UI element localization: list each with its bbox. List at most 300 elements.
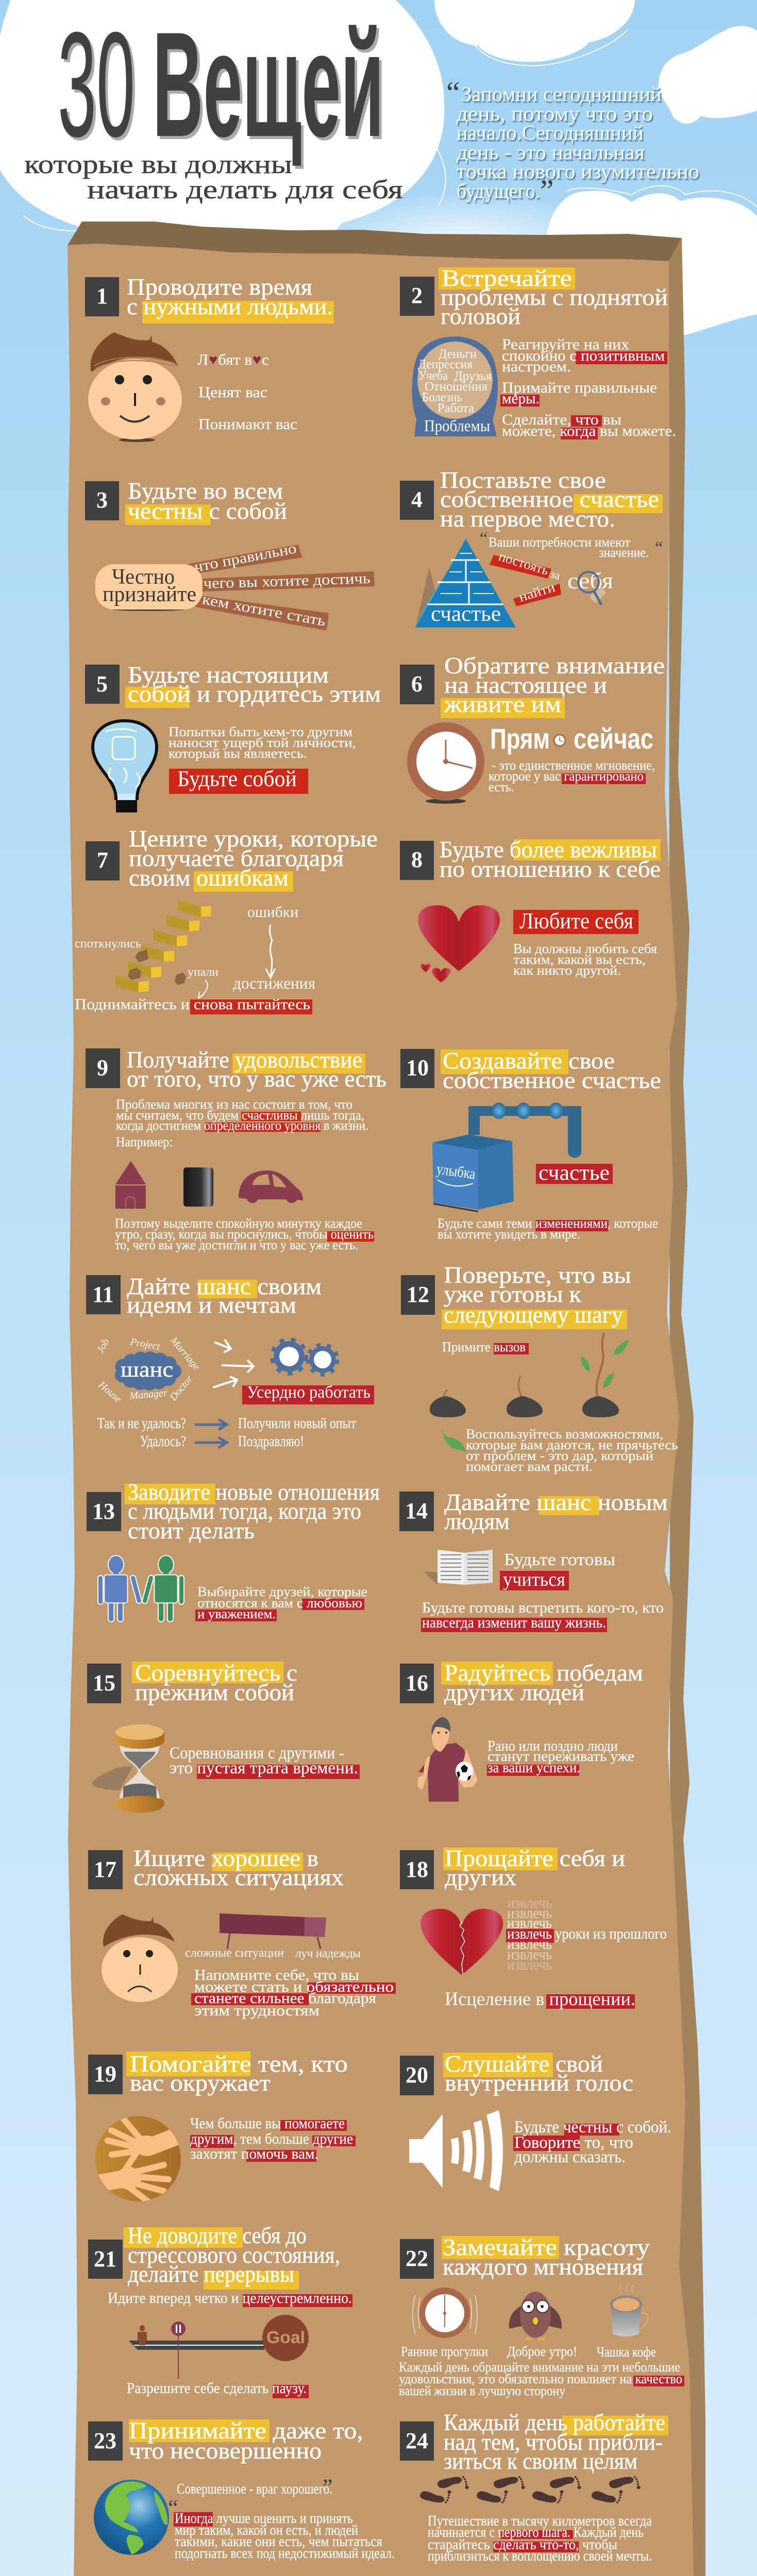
heading 4 (440, 467, 663, 532)
heading 23 (129, 2418, 363, 2464)
illustration: honest admission rays: что правильно (193, 540, 298, 575)
heading 1: Проводите время (127, 274, 312, 300)
illustration: happiness pyramid (415, 539, 516, 628)
panel: item 11 (86, 1274, 374, 1450)
number badge 10 (400, 1049, 434, 1088)
heading 21: делайте перерывы (128, 2261, 294, 2287)
text block: вы хотите увидеть в мире. (438, 1227, 580, 1242)
heading 10: собственное счастье (443, 1067, 661, 1093)
number badge 14: 14 (405, 1498, 428, 1523)
labels: Доброе утро! (507, 2344, 577, 2359)
heading 13: стоит делать (128, 1518, 255, 1544)
number badge 3: 3 (96, 487, 108, 513)
tag: work hard: Усердно работать (247, 1383, 371, 1402)
illustration: honest admission rays: кем хотите стать (201, 591, 327, 630)
icons: house, phone, car (115, 1161, 303, 1209)
number badge 11 (86, 1275, 121, 1314)
panel: item 15 (87, 1660, 360, 1813)
heading 21 (124, 2223, 340, 2290)
number badge 1 (85, 277, 119, 316)
text block: за ваши успехи. (487, 1760, 580, 1776)
text block: удовольствия, это обязательно повлияет на качество (399, 2371, 682, 2386)
illustration: chance cloud: Marriage (168, 1334, 202, 1372)
heading 18: Прощайте себя и (445, 1845, 625, 1871)
text block (513, 941, 657, 978)
text block: захотят помочь вам. (190, 2145, 318, 2162)
heading 7: получаете благодаря (129, 845, 344, 871)
now text: которое у вас гарантировано (489, 769, 644, 784)
text block: как никто другой. (513, 963, 621, 978)
heading 15: Соревнуйтесь с (135, 1660, 297, 1686)
text: accept the challenge: Примите вызов (442, 1340, 526, 1354)
heading 14: Давайте шанс новым (444, 1489, 668, 1515)
number badge 11: 11 (92, 1282, 114, 1307)
text block: относятся к вам с любовью (197, 1596, 362, 1611)
illustration: growing seeds (430, 1333, 629, 1417)
text: learn from the past: извлечь (507, 1905, 552, 1922)
heading 1 (127, 274, 334, 324)
icon: broken heart (420, 1909, 503, 1975)
illustration: crystal ball of problems: Друзья (454, 369, 492, 383)
text block: которые вам даются, не прячьтесь (466, 1437, 678, 1452)
list: qualities: Л♥бят в♥с (197, 351, 269, 368)
heading 18 (443, 1845, 625, 1890)
text block: таким, какой вы есть, (513, 952, 646, 967)
text block (116, 1097, 368, 1149)
heading 3: честны с собой (128, 498, 287, 524)
panel: item 9 (86, 1047, 386, 1252)
text block (421, 1599, 664, 1632)
illustration: crystal ball of problems: Проблемы (424, 416, 490, 435)
text block: Например: (116, 1134, 173, 1149)
heading 10: Создавайте свое (443, 1048, 615, 1074)
icon: light bulb (93, 721, 157, 812)
number badge 15: 15 (93, 1670, 115, 1696)
text block: Выбирайте друзей, которые (197, 1584, 367, 1599)
list: qualities (197, 351, 297, 433)
illustration: crystal ball of problems: Учеба (418, 369, 448, 383)
panel: item 4 (400, 467, 663, 628)
heading 17: Ищите хорошее в (133, 1845, 318, 1871)
text block: Будьте сами теми изменениями, которые (438, 1216, 658, 1231)
number badge 7 (86, 841, 120, 880)
number badge 18 (400, 1850, 434, 1889)
text block: Путешествие в тысячу километров всегда (428, 2513, 652, 2529)
illustration: road to goal (129, 2315, 309, 2379)
heading 13: Заводите новые отношения (128, 1479, 380, 1505)
text block: это пустая трата времени. (170, 1759, 358, 1777)
text: be ready to learn: учиться (503, 1569, 565, 1590)
text block: Напомните себе, что вы (194, 1967, 359, 1984)
text: learn from the past: извлечь (507, 1914, 552, 1931)
illustration: chance cloud: Doctor (167, 1374, 195, 1403)
text block: Сделайте, что вы (502, 411, 621, 428)
illustration: smiling face (88, 332, 182, 442)
heading 5: Будьте настоящим (128, 662, 329, 688)
text: learn from the past (506, 1894, 667, 1973)
heading 3: Будьте во всем (128, 478, 283, 504)
heading 9 (127, 1047, 386, 1092)
text block (428, 2513, 652, 2564)
heading 4: на первое место. (440, 506, 615, 532)
number badge 5: 5 (96, 671, 108, 697)
text block: другим, тем больше другие (190, 2130, 353, 2147)
text block (170, 1744, 360, 1779)
heading 5: собой и гордитесь этим (128, 681, 381, 707)
heading 5 (125, 662, 381, 708)
panel: item 5 (85, 662, 381, 812)
illustration: stairs of mistakes: ошибки (247, 904, 298, 921)
heading 3 (125, 478, 287, 525)
heading 24: над тем, чтобы прибли- (444, 2429, 663, 2455)
icon: loudspeaker (409, 2110, 503, 2191)
heading 14: людям (444, 1509, 510, 1534)
illustration: chance cloud (94, 1334, 254, 1405)
panel: item 2 (400, 265, 676, 439)
icon: owl (509, 2292, 562, 2340)
panel: item 17 (88, 1845, 396, 2019)
tag: be yourself: Будьте собой (177, 766, 297, 791)
panel: item 24 (400, 2410, 668, 2564)
text block: Говорите то, что (514, 2133, 633, 2152)
heading 23: что несовершенно (129, 2438, 322, 2464)
text block: Попытки быть кем-то другим (169, 724, 352, 739)
heading 9: от того, что у вас уже есть (127, 1066, 386, 1092)
text block: такими, какие они есть, чем пытаться (175, 2534, 382, 2550)
tags: stand up for / find yourself: постоять (497, 549, 550, 578)
heading 11: Дайте шанс своим (127, 1274, 322, 1299)
quote: день, потому что это (457, 102, 653, 125)
text block (442, 1427, 678, 1474)
number badge 18: 18 (406, 1857, 428, 1882)
number badge 14 (399, 1492, 434, 1531)
heading 9: Получайте удовольствие (127, 1047, 362, 1073)
number badge 19: 19 (94, 2061, 116, 2087)
number badge 10: 10 (406, 1055, 429, 1080)
tag: love yourself: Любите себя (519, 908, 633, 934)
panel: item 19 (88, 2051, 356, 2202)
text block: Соревнования с другими - (170, 1744, 344, 1762)
illustration: cloud with silver lining bench (185, 1913, 361, 1960)
text block: мы считаем, что будем счастливы лишь тогда, (116, 1108, 364, 1123)
number badge 21 (88, 2240, 123, 2279)
heading 4: Поставьте свое (440, 467, 606, 493)
number badge 9: 9 (97, 1055, 108, 1080)
illustration: crystal ball of problems: Болезнь (422, 391, 462, 404)
heading 21: Не доводите себя до (128, 2223, 307, 2248)
now text: есть. (489, 779, 514, 794)
text block: вашей жизни в лучшую сторону (399, 2383, 565, 2398)
text block: Чем больше вы помогаете (190, 2115, 345, 2132)
tags: stand up for / find yourself: за (549, 567, 562, 582)
heading 23: Принимайте даже то, (129, 2418, 363, 2444)
subtitle: начать делать для себя (87, 175, 403, 205)
number badge 3 (85, 481, 119, 520)
quote (168, 2475, 333, 2520)
number badge 17: 17 (94, 1857, 116, 1882)
illustration: crystal ball of problems: Работа (438, 401, 474, 415)
text block: Поэтому выделите спокойную минутку каждое (115, 1216, 362, 1231)
panel: item 14 (399, 1489, 668, 1632)
text block: можете, когда вы можете. (502, 422, 676, 439)
heading 12: Поверьте, что вы (444, 1262, 631, 1288)
number badge 22 (400, 2239, 434, 2279)
number badge 23: 23 (94, 2428, 116, 2453)
number badge 17 (88, 1850, 123, 1889)
heading 2: головой (441, 303, 520, 329)
heading 13: с людьми тогда, когда это (128, 1498, 361, 1524)
text block (500, 336, 676, 439)
text block: который вы являетесь. (169, 746, 307, 761)
heading 19: Помогайте тем, кто (130, 2051, 348, 2077)
heading 1: с нужными людьми. (127, 294, 333, 319)
text block: утро, сразу, когда вы проснулись, чтобы оценить (115, 1227, 374, 1242)
text block: навсегда изменит вашу жизнь. (422, 1614, 606, 1631)
illustration: sad face (102, 1914, 178, 2002)
quote: your needs matter: “ (480, 529, 487, 548)
text block: настроем. (502, 358, 571, 375)
illustration: cloud with silver lining bench: сложные ситуации (185, 1946, 284, 1960)
list: qualities: Понимают вас (198, 416, 297, 433)
panel: item 16 (400, 1660, 643, 1802)
number badge 8 (400, 841, 434, 880)
illustration: crystal ball of problems (412, 336, 498, 436)
icon: morning clock (412, 2287, 477, 2338)
text block: приблизиться к воплощению своей мечты. (428, 2548, 652, 2564)
illustration: smile machine (432, 1103, 581, 1212)
illustration: smile machine: улыбка (435, 1160, 477, 1183)
text block: Примайте правильные (502, 379, 657, 396)
number badge 8: 8 (411, 847, 423, 872)
number badge 1: 1 (96, 283, 108, 309)
labels (401, 2344, 656, 2360)
illustration: chance cloud: House (96, 1379, 124, 1405)
illustration: stairs of mistakes (75, 900, 315, 1014)
main wooden signboard (68, 222, 705, 2576)
number badge 6 (400, 665, 434, 704)
heading 22: каждого мгновения (443, 2254, 643, 2280)
text block: можете стать и обязательно (194, 1978, 394, 1995)
number badge 4: 4 (411, 487, 423, 512)
number badge 5 (85, 665, 120, 704)
panel: item 8 (400, 837, 661, 982)
icon: open book (424, 1550, 493, 1585)
heading 20 (443, 2051, 633, 2096)
text: Вещей (153, 1, 384, 168)
heading 24: Каждый день работайте (444, 2410, 665, 2435)
text block (190, 2115, 356, 2162)
illustration: crystal ball of problems: Деньги (439, 347, 477, 361)
text block (115, 1216, 374, 1252)
text block: Будьте честны с собой. (514, 2118, 671, 2137)
heading 22: Замечайте красоту (443, 2234, 650, 2260)
text block: старайтесь сделать что-то, чтобы (428, 2537, 617, 2553)
subtitle: которые вы должны (24, 150, 292, 179)
labels: Чашка кофе (597, 2344, 656, 2360)
panel: item 12 (401, 1262, 678, 1474)
heading 6: живите им (444, 691, 561, 717)
heading 11: идеям и мечтам (127, 1292, 296, 1318)
number badge 12 (401, 1275, 435, 1315)
heading 22 (442, 2234, 650, 2280)
text block: станут переживать уже (487, 1749, 634, 1765)
number badge 2: 2 (411, 283, 423, 308)
text block: мир таким, какой он есть, и людей (175, 2522, 358, 2538)
heading 14 (444, 1489, 668, 1534)
text block (399, 2360, 684, 2398)
text block: от проблем - это дар, который (466, 1448, 653, 1463)
quote: будущего. (457, 179, 540, 202)
number badge 24: 24 (406, 2428, 428, 2453)
heading 18: других (445, 1865, 516, 1890)
icon: hearts (418, 905, 500, 982)
panel: item 7 (75, 826, 378, 1014)
heading 20: внутренний голос (445, 2070, 633, 2096)
number badge 4 (400, 481, 434, 520)
text block: Иногда лучше оценить и принять (175, 2511, 353, 2527)
heading 24: зиться к своим целям (444, 2448, 637, 2474)
list: qualities: Ценят вас (198, 384, 267, 401)
number badge 22: 22 (406, 2246, 428, 2271)
heading 4: собственное счастье (440, 486, 659, 512)
heading 7 (129, 826, 378, 892)
illustration: man with football (417, 1717, 478, 1802)
heading 6 (441, 653, 665, 718)
panel: item 22 (399, 2234, 684, 2398)
number badge 12: 12 (407, 1282, 429, 1307)
text block: Вы должны любить себя (513, 941, 657, 956)
number badge 7: 7 (97, 848, 108, 873)
labels: Ранние прогулки (401, 2344, 488, 2359)
outcomes: Так и не удалось? (97, 1415, 186, 1432)
text block (195, 1584, 367, 1621)
quote: your needs matter: Ваши потребности имеют (489, 535, 630, 550)
text block: этим трудностям (194, 2002, 319, 2019)
heading 12: следующему шагу (444, 1302, 623, 1328)
number badge 20 (400, 2056, 434, 2095)
panel: item 18 (400, 1845, 667, 2010)
illustration: friends holding hands (98, 1555, 184, 1622)
illustration: crystal ball of problems: Отношения (425, 380, 487, 394)
now text: Прям (490, 722, 550, 755)
text block (487, 1738, 634, 1776)
heading 24 (444, 2410, 668, 2474)
number badge 24 (400, 2421, 434, 2461)
heading 2: Встречайте (442, 265, 572, 291)
text block: меры. (502, 390, 540, 407)
text: allow a pause: Разрешите себе сделать паузу. (127, 2380, 307, 2397)
heading 16: других людей (444, 1680, 584, 1705)
quote: Запомни сегодняшний (461, 82, 662, 106)
illustration: chance cloud: шанс (121, 1358, 173, 1382)
illustration: chance cloud: Job (94, 1336, 112, 1355)
tags: stand up for / find yourself (490, 549, 613, 606)
illustration: helping hands (93, 2116, 186, 2202)
number badge 13 (87, 1492, 121, 1531)
heading 7: своим ошибкам (129, 865, 289, 891)
heading 16 (441, 1660, 643, 1705)
text block: подогнать всех под недостижимый идеал. (175, 2546, 395, 2562)
illustration: honest admission rays: признайте (103, 583, 196, 606)
outcomes: Удалось? (140, 1433, 186, 1450)
panel: item 3 (85, 478, 375, 631)
quote: Совершенное - враг хорошего. (177, 2481, 332, 2497)
clouds (0, 0, 757, 335)
heading 12: уже готовы к (444, 1281, 581, 1307)
heading 11 (127, 1274, 322, 1318)
text: learn from the past: извлечь (507, 1925, 552, 1942)
quote: ” (323, 2475, 333, 2500)
quote: начало.Сегодняшний (457, 121, 644, 144)
outcomes (97, 1415, 356, 1450)
quote: точка нового изумительно (457, 160, 699, 183)
quote: ” (540, 174, 554, 208)
icon: clock (407, 722, 484, 804)
text block: когда достигнем определенного уровня в жизни. (116, 1118, 368, 1133)
heading 8: Будьте более вежливы (440, 837, 657, 862)
panel: item 6 (400, 653, 665, 804)
text: be ready to learn (500, 1550, 615, 1590)
illustration: cloud with silver lining bench: луч надежды (295, 1947, 361, 1960)
text block: спокойно с позитивным (502, 347, 665, 364)
text block: помогает вам расти. (466, 1459, 593, 1474)
panel: item 13 (87, 1479, 380, 1622)
text block (438, 1216, 658, 1242)
panel: item 10 (400, 1048, 661, 1242)
text: learn from the past: извлечь (507, 1956, 552, 1973)
text block: Будьте готовы встретить кого-то, кто (422, 1599, 664, 1616)
heading 16: Радуйтесь победам (444, 1660, 643, 1686)
now text: сейчас (574, 722, 653, 755)
panel: item 20 (400, 2051, 671, 2191)
number badge 15 (87, 1664, 121, 1703)
heading 13 (125, 1479, 380, 1544)
quote: “ (168, 2495, 178, 2520)
illustration: honest admission rays: Честно (112, 565, 175, 589)
number badge 20: 20 (406, 2062, 428, 2088)
number badge 9 (86, 1048, 120, 1088)
title: 30 Вещей: 30 (58, 1, 135, 168)
illustration: chance cloud: Project (129, 1336, 161, 1352)
illustration: stairs of mistakes: упали (188, 965, 218, 979)
illustration: stairs of mistakes: споткнулись (75, 937, 141, 951)
quote: “ (446, 76, 460, 110)
heading 8 (440, 837, 661, 882)
heading 21: стрессового состояния, (128, 2242, 340, 2268)
illustration: chance cloud: Manager (129, 1387, 168, 1402)
heading 12 (442, 1262, 631, 1329)
text: healing in forgiveness: Исцеление в прощении. (445, 1989, 635, 2010)
illustration: crystal ball of problems: Депрессия (418, 358, 473, 371)
number badge 19 (88, 2055, 123, 2094)
heading 19 (126, 2051, 348, 2096)
tags: stand up for / find yourself: себя (567, 568, 613, 594)
heading 17 (133, 1845, 344, 1890)
text: learn from the past: уроки из прошлого (555, 1925, 667, 1942)
number badge 13: 13 (92, 1499, 115, 1524)
number badge 16: 16 (406, 1670, 428, 1696)
now text (489, 722, 655, 794)
outcomes: Поздравляю! (238, 1433, 304, 1450)
illustration: honest admission rays: чего вы хотите достичь (203, 570, 371, 592)
icon: globe (94, 2480, 169, 2555)
text block (513, 2118, 671, 2166)
panel: item 1 (85, 274, 334, 442)
text block (191, 1967, 396, 2019)
text: learn from the past: извлечь (507, 1894, 552, 1911)
text block: Каждый день обращайте внимание на эти небольшие (399, 2360, 680, 2375)
icon: cup of coffee (610, 2283, 648, 2336)
